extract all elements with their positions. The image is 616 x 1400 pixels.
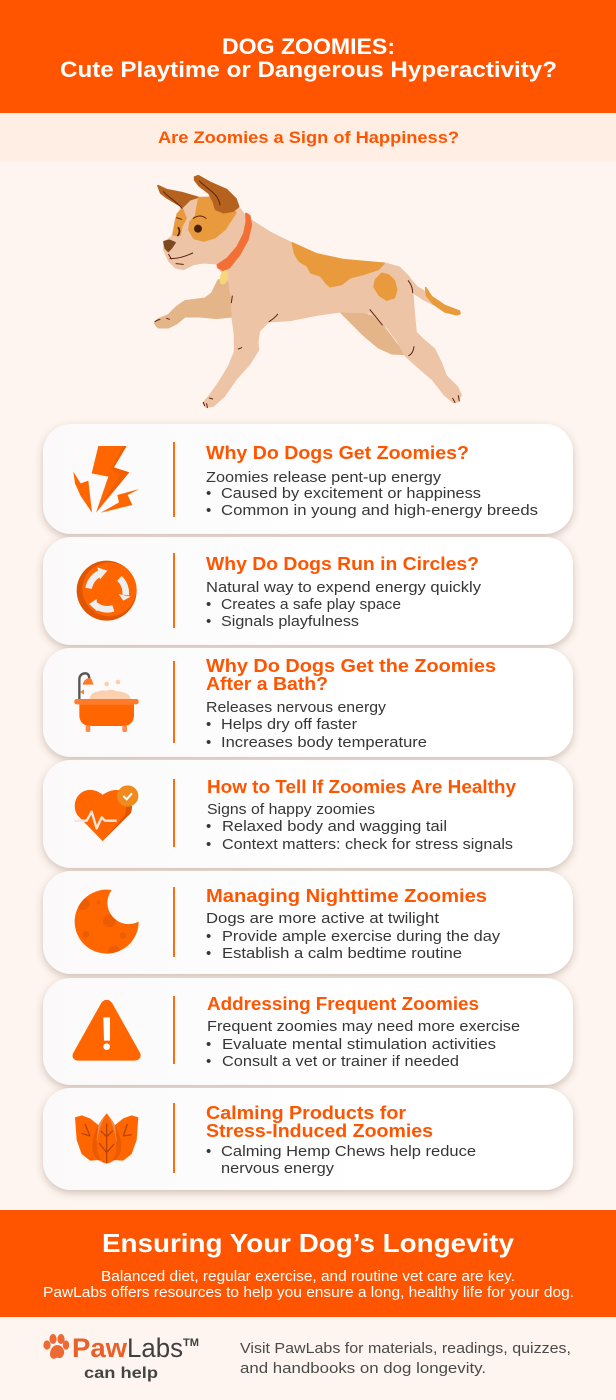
body text: • — [206, 734, 211, 751]
subheading band: Are Zoomies a Sign of Happiness? — [158, 128, 459, 147]
call to action text: and handbooks on dog longevity. — [240, 1360, 486, 1377]
icon: circular arrows — [77, 561, 137, 621]
body text: • — [206, 945, 211, 962]
icon: heart with check — [74, 785, 138, 841]
card 6: frequent zoomies — [43, 978, 573, 1085]
body text: • — [206, 1036, 211, 1053]
body text: • — [206, 818, 211, 835]
card 3: after a bath — [43, 648, 573, 757]
body text: Dogs are more active at twilight — [206, 910, 440, 927]
body text: Helps dry off faster — [221, 716, 357, 733]
body text: Zoomies release pent-up energy — [206, 469, 442, 486]
logo wordmark: Labs — [127, 1333, 183, 1363]
body text: • — [206, 596, 211, 613]
icon: warning triangle — [73, 1000, 141, 1061]
heading: How to Tell If Zoomies Are Healthy — [207, 776, 517, 797]
heading: Stress-Induced Zoomies — [206, 1120, 433, 1141]
body text — [206, 469, 538, 519]
body text — [206, 1143, 476, 1177]
body text: Context matters: check for stress signals — [222, 836, 513, 853]
body text — [206, 801, 513, 853]
body text: Releases nervous energy — [206, 699, 387, 716]
body text — [206, 910, 501, 962]
body text: Signals playfulness — [221, 613, 359, 630]
divider line — [173, 553, 175, 628]
call to action text — [240, 1340, 571, 1377]
banner text: Balanced diet, regular exercise, and routine vet care are key. — [101, 1269, 515, 1285]
body text: Creates a safe play space — [221, 596, 401, 613]
title: Cute Playtime or Dangerous Hyperactivity? — [60, 57, 557, 82]
title: DOG ZOOMIES: — [222, 34, 395, 59]
body text: Evaluate mental stimulation activities — [222, 1036, 496, 1053]
PawLabs logo — [43, 1333, 199, 1382]
call to action text: Visit PawLabs for materials, readings, quizzes, — [240, 1340, 571, 1357]
body text — [206, 579, 482, 630]
divider line — [173, 996, 175, 1064]
logo wordmark: Paw — [72, 1333, 128, 1363]
heading: Why Do Dogs Run in Circles? — [206, 553, 479, 574]
illustration: running dog — [155, 176, 461, 408]
icon: leaves — [75, 1113, 138, 1163]
body text: Natural way to expend energy quickly — [206, 579, 482, 596]
header banner — [0, 0, 616, 113]
card 4: healthy zoomies — [43, 760, 573, 868]
body text: Increases body temperature — [221, 734, 427, 751]
heading: After a Bath? — [206, 673, 328, 694]
banner text — [43, 1269, 574, 1301]
body text: Common in young and high-energy breeds — [221, 502, 538, 519]
body text: Frequent zoomies may need more exercise — [207, 1018, 520, 1035]
heading — [206, 1102, 433, 1141]
card 5: nighttime — [43, 871, 573, 974]
body text: • — [206, 502, 211, 519]
PawLabs logo: can help — [84, 1365, 158, 1382]
body text: Consult a vet or trainer if needed — [222, 1053, 459, 1070]
heading: Why Do Dogs Get Zoomies? — [206, 442, 469, 463]
banner heading: Ensuring Your Dog’s Longevity — [102, 1228, 515, 1258]
divider line — [173, 779, 175, 847]
divider line — [173, 887, 175, 957]
heading: Why Do Dogs Get the Zoomies — [206, 655, 496, 676]
card 7: calming products — [43, 1088, 573, 1190]
body text: Provide ample exercise during the day — [222, 928, 501, 945]
divider line — [173, 661, 175, 743]
icon: bathtub — [74, 673, 139, 732]
subheading band — [0, 113, 616, 162]
body text — [206, 1018, 520, 1070]
body text: Caused by excitement or happiness — [221, 485, 481, 502]
body text: nervous energy — [221, 1160, 335, 1177]
longevity banner — [0, 1210, 616, 1317]
body text: • — [206, 716, 211, 733]
icon: paw — [43, 1334, 69, 1359]
body text: Signs of happy zoomies — [207, 801, 375, 818]
divider line — [173, 1103, 175, 1173]
icon: crescent moon — [75, 890, 139, 958]
body text — [206, 699, 427, 751]
body text: • — [206, 1053, 211, 1070]
card 1: why zoomies — [43, 424, 573, 534]
body text: • — [206, 613, 211, 630]
heading: Managing Nighttime Zoomies — [206, 885, 487, 906]
body text: • — [206, 1143, 211, 1160]
heading: Calming Products for — [206, 1102, 406, 1123]
card 2: running in circles — [43, 537, 573, 645]
banner text: PawLabs offers resources to help you ensure a long, healthy life for your dog. — [43, 1285, 574, 1301]
heading — [206, 655, 496, 694]
body text: • — [206, 928, 211, 945]
divider line — [173, 442, 175, 517]
heading: Addressing Frequent Zoomies — [207, 993, 479, 1014]
icon: lightning bolts — [73, 446, 139, 513]
body text: Calming Hemp Chews help reduce — [221, 1143, 476, 1160]
title — [60, 34, 557, 82]
body text: Establish a calm bedtime routine — [222, 945, 462, 962]
body text: Relaxed body and wagging tail — [222, 818, 447, 835]
body text: • — [206, 485, 211, 502]
body text: • — [206, 836, 211, 853]
PawLabs logo: TM — [183, 1337, 199, 1349]
